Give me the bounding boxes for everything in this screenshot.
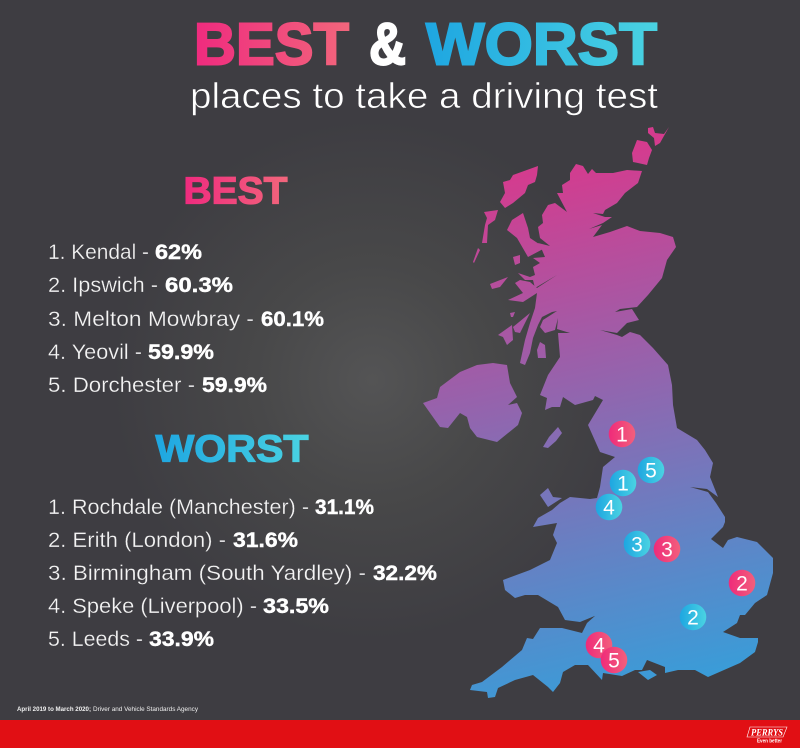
- map: Outer Hebrides: [500, 166, 538, 208]
- map: Northern Ireland: [423, 363, 522, 442]
- list: worst: [48, 496, 437, 651]
- map: Shetland: [648, 127, 669, 146]
- title: BEST: [194, 12, 349, 78]
- map: Skye: [507, 213, 545, 257]
- list: worst: 32.2%: [373, 562, 437, 585]
- list: best: 3. Melton Mowbray -: [48, 308, 254, 331]
- map of the UK: [423, 127, 773, 698]
- marker: worst 4 Speke: [596, 494, 622, 520]
- list: best: 5. Dorchester -: [48, 374, 195, 397]
- list: best: 59.9%: [202, 374, 267, 397]
- list: worst: 33.9%: [149, 628, 214, 651]
- map: Islay: [498, 325, 513, 345]
- title: WORST: [426, 12, 657, 78]
- map: Raasay islet: [513, 255, 520, 265]
- heading: worst: WORST: [156, 428, 308, 470]
- marker: worst 2 Erith: [680, 604, 706, 630]
- marker: best 2 Ipswich: [729, 570, 755, 596]
- map: Jura: [513, 313, 530, 333]
- marker: worst 3 Birmingham: [624, 531, 650, 557]
- map: Anglesey: [540, 488, 562, 507]
- list: worst: 31.6%: [233, 529, 298, 552]
- source note: Driver and Vehicle Standards Agency: [93, 707, 198, 713]
- list: worst: 5. Leeds -: [48, 628, 143, 651]
- list: best: 2. Ipswich -: [48, 274, 158, 297]
- marker: best 4 Yeovil: 4: [593, 634, 605, 658]
- marker: best 1 Kendal: 1: [616, 424, 628, 446]
- list: worst: 2. Erith (London) -: [48, 529, 226, 552]
- list: best: 62%: [155, 241, 202, 264]
- list: worst: 1. Rochdale (Manchester) -: [48, 496, 309, 519]
- logo: Perrys: Even better: [757, 738, 782, 744]
- marker: best 3 Melton Mowbray: 3: [661, 538, 673, 562]
- marker: best 3 Melton Mowbray: [654, 536, 680, 562]
- map: Coll and Tiree: [490, 277, 508, 289]
- title: [194, 12, 657, 78]
- logo: Perrys: [747, 727, 787, 744]
- marker: best 5 Dorchester: [601, 647, 627, 673]
- list: best: 4. Yeovil -: [48, 341, 142, 364]
- list: best: 60.3%: [165, 274, 233, 297]
- marker: worst 3 Birmingham: 3: [631, 534, 643, 556]
- title: &: [369, 12, 406, 78]
- map: Arran: [537, 342, 546, 358]
- marker: worst 4 Speke: 4: [603, 496, 615, 520]
- marker: best 5 Dorchester: 5: [608, 650, 620, 672]
- map: Isle of Man: [543, 427, 562, 448]
- marker: worst 1 Rochdale: [610, 470, 636, 496]
- list: best: [48, 241, 324, 397]
- list: worst: 3. Birmingham (South Yardley) -: [48, 562, 366, 585]
- marker: best 4 Yeovil: [586, 632, 612, 658]
- marker: worst 2 Erith: 2: [687, 606, 699, 630]
- list: best: 59.9%: [148, 341, 214, 364]
- footer band: [0, 720, 800, 748]
- map: Colonsay: [510, 312, 515, 317]
- map: Great Britain mainland: [470, 164, 773, 698]
- source note: [17, 707, 198, 713]
- list: best: 60.1%: [261, 308, 324, 331]
- marker: worst 5 Leeds: 5: [645, 460, 657, 482]
- list: best: 1. Kendal -: [48, 241, 149, 264]
- marker: worst 5 Leeds: [638, 457, 664, 483]
- source note: April 2019 to March 2020;: [17, 707, 91, 713]
- map: Barra: [473, 248, 480, 263]
- logo: Perrys: PERRYS: [751, 728, 783, 738]
- map: Isle of Wight: [638, 670, 657, 680]
- heading: best: BEST: [184, 170, 288, 212]
- map: Uist: [482, 210, 498, 243]
- marker: best 2 Ipswich: 2: [736, 572, 748, 596]
- list: worst: 31.1%: [315, 496, 374, 519]
- marker: worst 1 Rochdale: 1: [617, 472, 629, 496]
- marker: best 1 Kendal: [609, 421, 635, 447]
- list: worst: 4. Speke (Liverpool) -: [48, 595, 257, 618]
- list: worst: 33.5%: [263, 595, 329, 618]
- subtitle: places to take a driving test: [190, 75, 658, 116]
- map: Orkney: [632, 140, 652, 165]
